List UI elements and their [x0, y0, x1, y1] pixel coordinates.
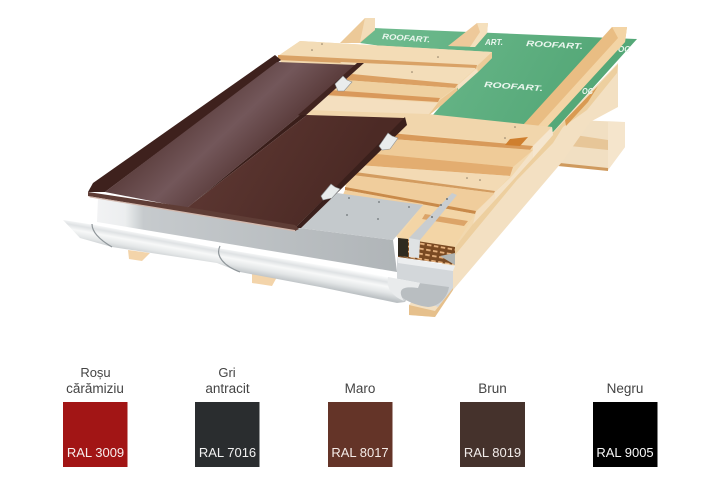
- deck screws: [311, 43, 516, 181]
- swatch: Roșu cărămiziu: cărămiziu: [66, 381, 124, 396]
- swatch: Negru: RAL 9005: [596, 445, 654, 460]
- membrane brand marks: ROOFART.: [484, 80, 543, 93]
- membrane brand marks: ART.: [484, 38, 503, 47]
- membrane brand marks: OC: [582, 87, 593, 96]
- swatch: Maro: [328, 381, 392, 467]
- swatch: Negru: Negru: [607, 381, 643, 396]
- ventilation mesh: [398, 238, 455, 265]
- swatch: Gri antracit: Gri: [218, 365, 236, 380]
- metal clips: [321, 76, 398, 200]
- swatch: Roșu cărămiziu: RAL 3009: [67, 445, 124, 460]
- wide cross board: [300, 110, 553, 158]
- top board: [278, 41, 492, 69]
- swatch: Gri antracit: [195, 365, 260, 467]
- membrane brand marks: ROOFART.: [526, 39, 583, 51]
- swatch: Brun: [460, 381, 525, 467]
- membrane brand marks: ROOFART.: [382, 32, 430, 44]
- metal flashing: [97, 193, 423, 272]
- second standing seam panel: [187, 115, 407, 228]
- support beam: [558, 120, 625, 171]
- lower slats: [330, 133, 533, 249]
- swatch: Gri antracit: RAL 7016: [199, 445, 256, 460]
- swatch: Maro: Maro: [345, 381, 375, 396]
- first standing seam panel: [88, 55, 364, 208]
- upper slats: [310, 52, 492, 116]
- swatch: Gri antracit: antracit: [205, 381, 250, 396]
- green roofing membrane: [360, 28, 637, 132]
- swatch: Roșu cărămiziu: [63, 365, 128, 467]
- membrane brand marks: [382, 32, 630, 96]
- panel front edge: [88, 192, 299, 232]
- swatch: Negru: [593, 381, 658, 467]
- gutter: [63, 220, 455, 307]
- metal strap: [409, 193, 457, 258]
- swatch: Maro: RAL 8017: [331, 445, 389, 460]
- counter battens: [340, 18, 627, 127]
- swatch: Brun: Brun: [478, 381, 507, 396]
- swatch: Brun: RAL 8019: [464, 445, 521, 460]
- support blocks under gutter: [128, 250, 277, 286]
- rafter side: [409, 63, 618, 317]
- swatch: Roșu cărămiziu: Roșu: [80, 365, 111, 380]
- membrane brand marks: OC: [618, 45, 630, 54]
- wood deck boards: [278, 41, 553, 250]
